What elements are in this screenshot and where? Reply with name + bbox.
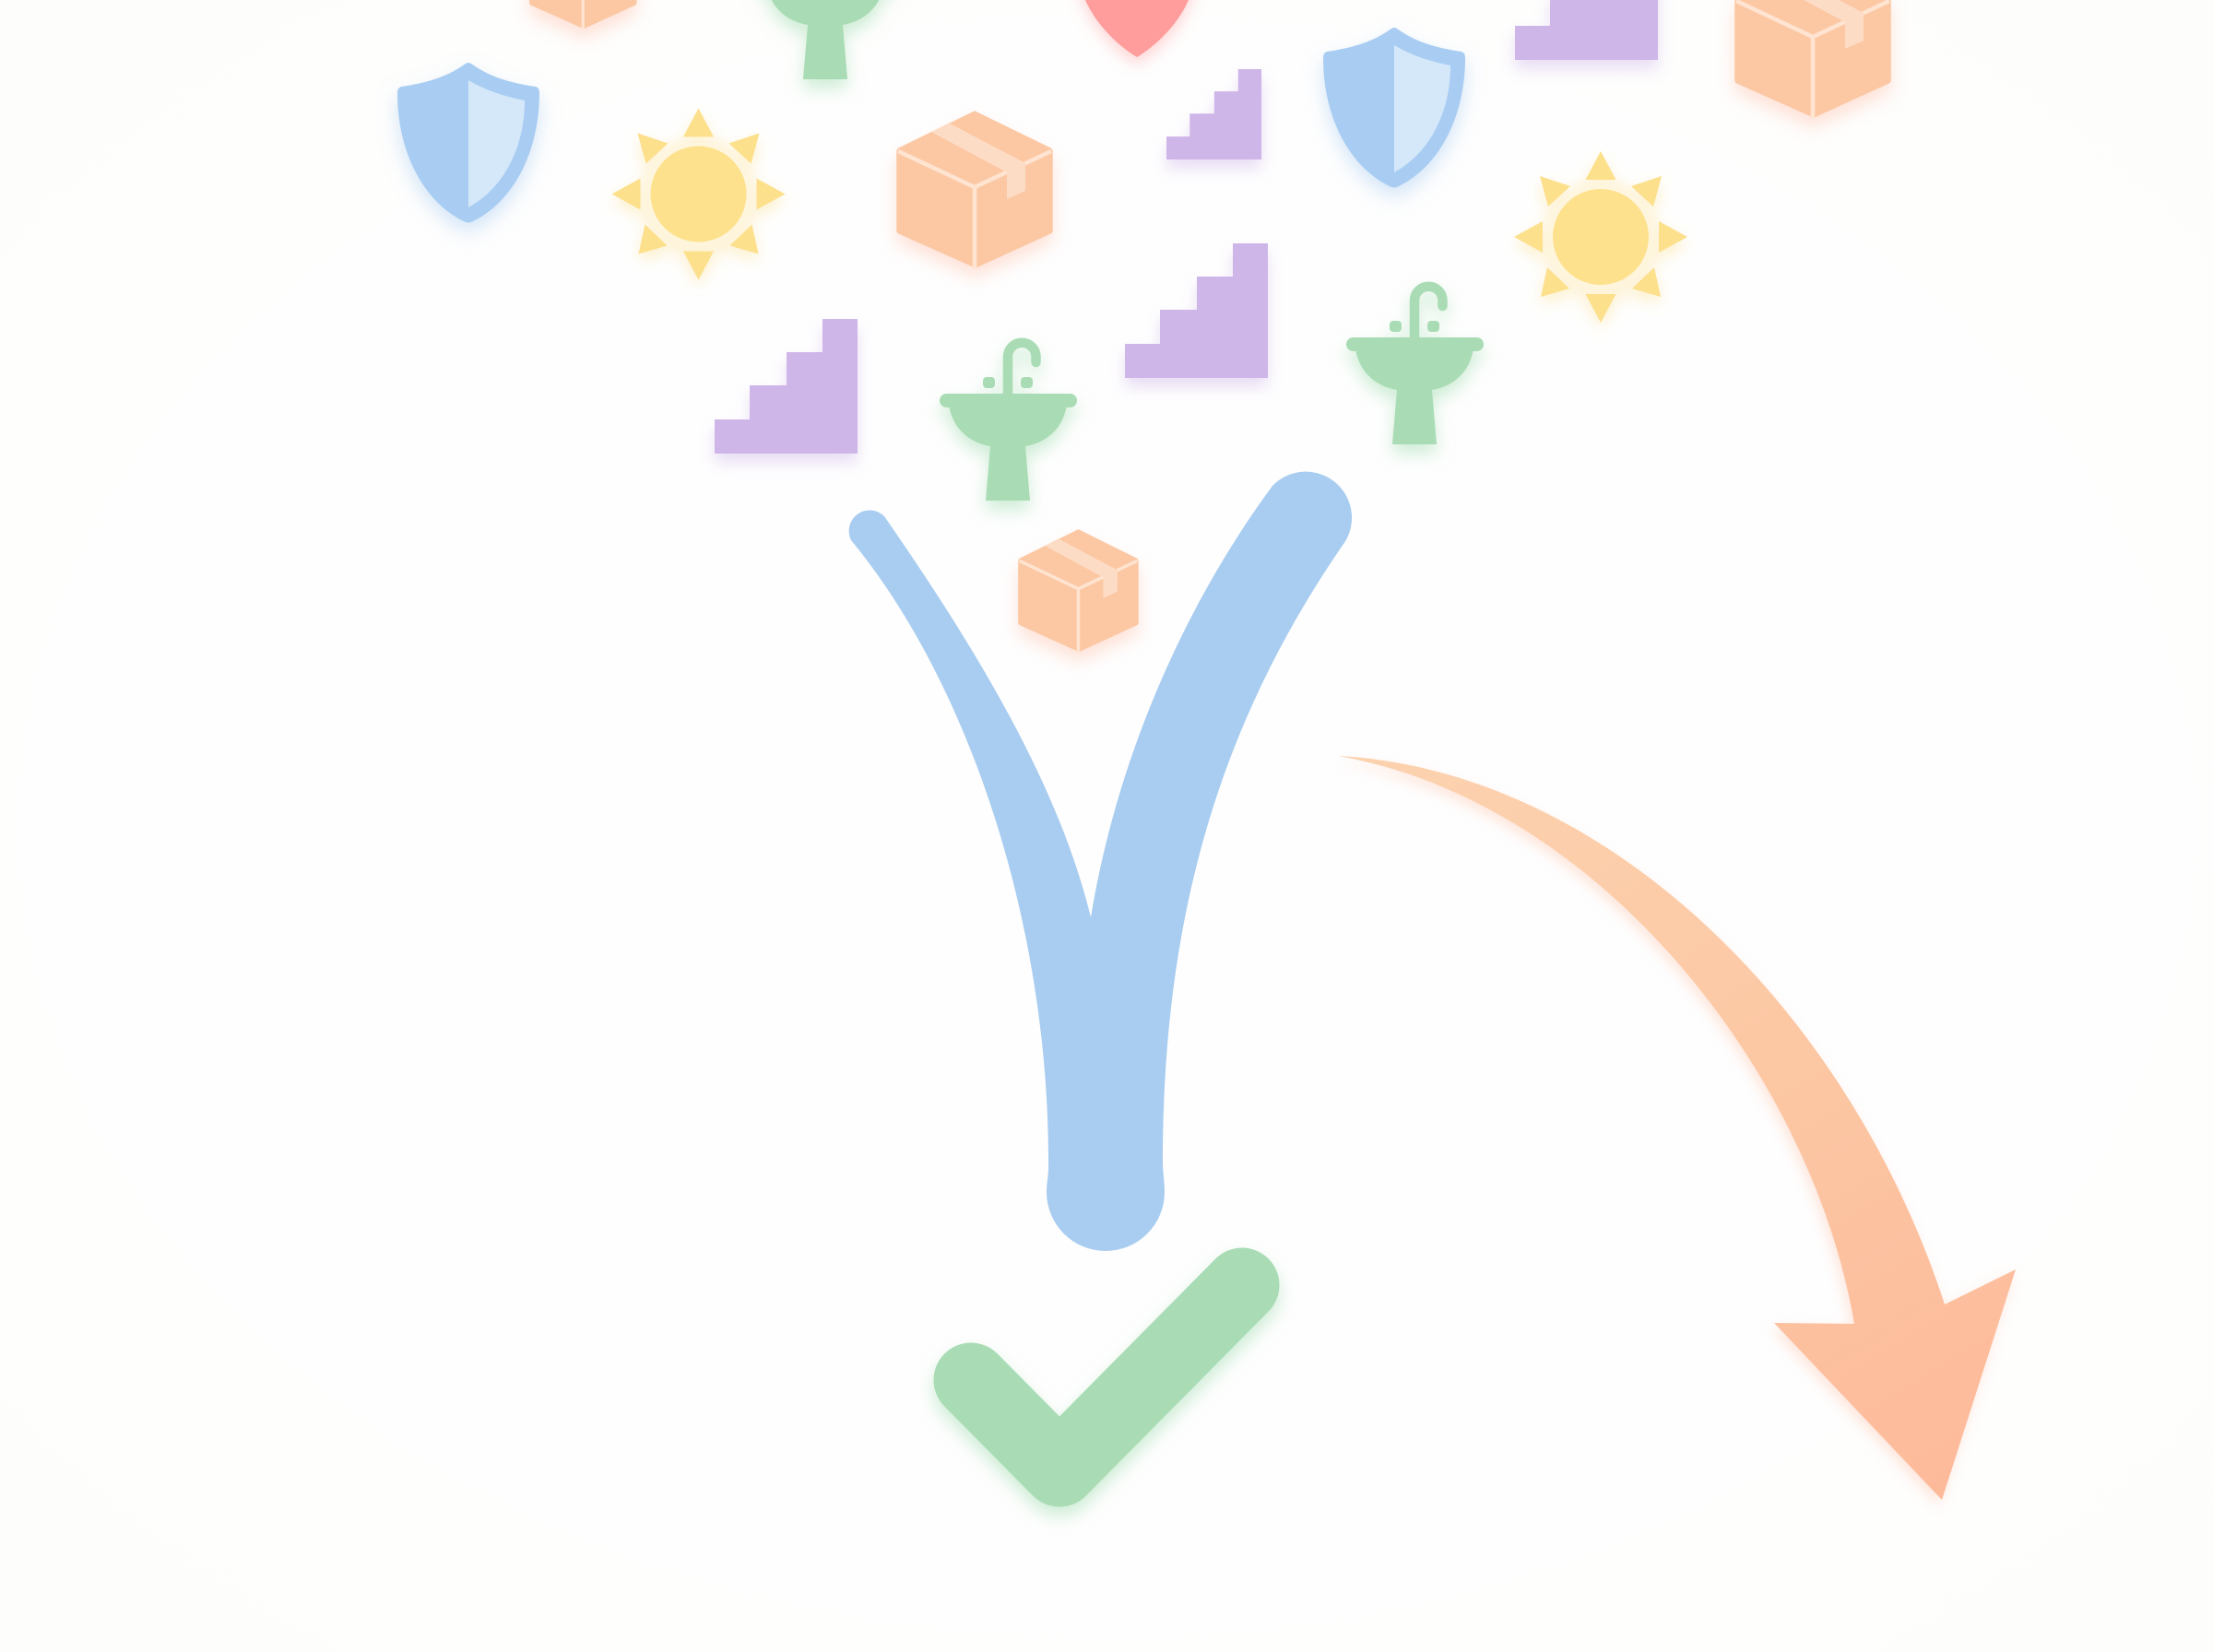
green check mark	[971, 1285, 1242, 1469]
icon: stairs, lower centre	[1125, 243, 1268, 378]
icon: stairs, lower left	[715, 319, 858, 454]
icon: box, top right partial	[1735, 0, 1890, 118]
icon: stairs, top partial	[1515, 0, 1658, 60]
icon: sun, left	[612, 109, 786, 280]
icon: red heart, top partial	[1075, 0, 1199, 57]
blue funnel Y shape	[849, 472, 1352, 1251]
icon: sun, right	[1514, 151, 1687, 323]
icon: sink, top partial	[757, 0, 894, 79]
icon: sink, lower left	[940, 343, 1077, 501]
icon: box, top left partial	[530, 0, 636, 29]
icon: shield, right	[1323, 28, 1465, 188]
icon: shield, left	[397, 63, 539, 223]
icon: box, small in funnel	[1019, 530, 1138, 652]
curved orange arrow	[1338, 756, 2016, 1500]
icon: box, large centre	[897, 112, 1052, 268]
icon: stairs, small	[1166, 69, 1261, 159]
icon: sink, lower right	[1346, 287, 1484, 444]
